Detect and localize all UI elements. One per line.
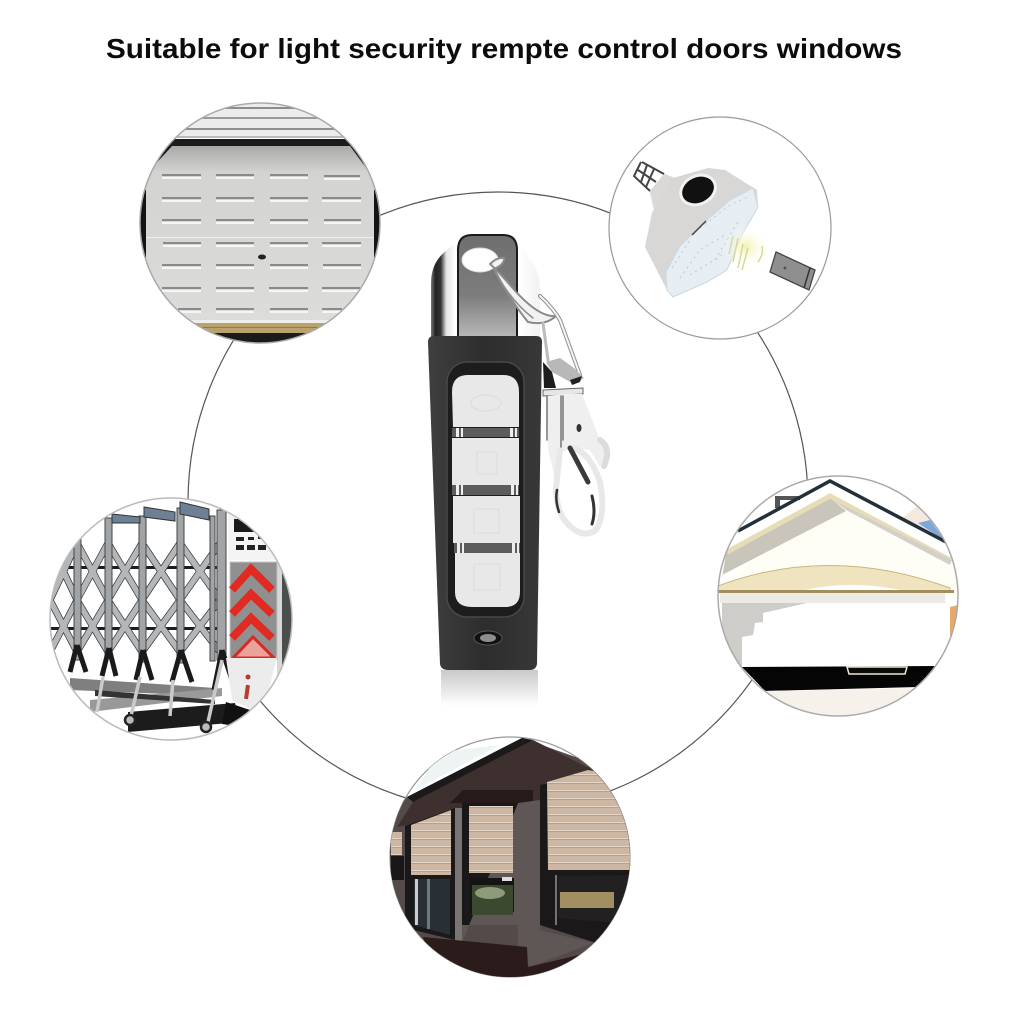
lower dark ledge bbox=[423, 937, 600, 985]
bulb light face bbox=[666, 188, 758, 297]
small remote bbox=[770, 252, 815, 290]
gable sky corner bbox=[900, 506, 939, 534]
bulb slit bbox=[692, 221, 706, 235]
roof eave bbox=[407, 738, 533, 802]
button 4 bbox=[455, 553, 520, 607]
gate horizontal bars bbox=[50, 566, 222, 630]
button separators bbox=[452, 428, 520, 553]
side small shutter bbox=[391, 832, 402, 855]
remote chrome head bbox=[431, 235, 540, 340]
bulb sensor lens bbox=[676, 170, 720, 210]
gate uprights bbox=[74, 508, 226, 663]
clasp body bbox=[547, 394, 608, 490]
panel: gable roof bbox=[718, 476, 958, 720]
garage door top stripes bbox=[176, 104, 344, 138]
left shutter bbox=[411, 810, 451, 875]
middle shutter bbox=[469, 806, 513, 873]
gable cornice arch bbox=[718, 565, 950, 591]
garage circle outline bbox=[140, 103, 380, 343]
swivel barrel bbox=[543, 358, 584, 388]
gate circle outline bbox=[50, 498, 292, 740]
clasp rivet bbox=[576, 424, 582, 432]
clasp tab shadow bbox=[600, 440, 607, 466]
gate wheels bbox=[125, 715, 211, 732]
window frames bbox=[405, 762, 640, 950]
beam bbox=[450, 790, 533, 803]
panel: folding gate bbox=[50, 498, 296, 740]
gate base shadow bbox=[222, 702, 250, 725]
keychain carabiner bbox=[490, 258, 608, 534]
gate warning sign bbox=[230, 562, 277, 658]
gable ground bbox=[766, 688, 914, 716]
bulb neck bbox=[649, 170, 675, 215]
swivel link bbox=[540, 296, 580, 375]
right window glass bbox=[555, 875, 640, 925]
house wall bbox=[380, 738, 640, 990]
garage side shadows bbox=[140, 146, 380, 260]
gate lower panel with mark bbox=[226, 658, 277, 709]
bulb face speckle bbox=[672, 196, 750, 278]
gate legs bbox=[70, 645, 232, 690]
gable beam bbox=[718, 590, 954, 603]
gate rails bbox=[70, 678, 240, 732]
remote dark insert bbox=[458, 235, 517, 337]
clasp edge lines bbox=[547, 396, 563, 447]
garage lock bbox=[258, 254, 266, 260]
gable arch inner bbox=[805, 585, 900, 590]
product: remote control bbox=[428, 235, 608, 706]
gable pediment bbox=[718, 490, 958, 595]
side small window bbox=[391, 856, 404, 880]
right shutter bbox=[547, 770, 640, 870]
gable blue glass bbox=[918, 520, 942, 538]
clasp dark accents bbox=[556, 448, 594, 524]
gate right wall bbox=[277, 564, 292, 676]
gable handle bbox=[847, 667, 907, 674]
garage door slats bbox=[162, 174, 361, 313]
panel: roller shutter windows bbox=[380, 737, 640, 990]
gable masonry stepped wall bbox=[722, 603, 806, 666]
gate scissor lattice bbox=[50, 543, 220, 652]
gate chrome struts bbox=[97, 660, 222, 722]
gable fascia bbox=[727, 496, 950, 560]
middle window glass bbox=[470, 877, 514, 915]
gate handles bbox=[112, 502, 209, 523]
signal waves bbox=[722, 225, 770, 270]
eave soffit bbox=[397, 740, 640, 827]
remote key hole bbox=[462, 248, 498, 272]
garage door panel seam bbox=[146, 237, 374, 238]
gable right trim bbox=[833, 500, 952, 565]
gable small dormer window bbox=[775, 496, 800, 508]
button 3 bbox=[453, 496, 520, 543]
gable orange side bbox=[950, 605, 957, 637]
center wall bbox=[462, 800, 593, 967]
bulb screw base bbox=[633, 162, 664, 191]
clasp hook loop bbox=[556, 448, 602, 534]
sky glow bbox=[415, 745, 500, 790]
left window glass bbox=[414, 879, 450, 935]
connecting ring bbox=[188, 192, 808, 812]
gate control box bbox=[228, 514, 276, 560]
panel: garage door bbox=[140, 103, 380, 343]
clasp top plate bbox=[543, 388, 583, 396]
remote reflection bbox=[441, 670, 538, 706]
title: Suitable for light security rempte control doors windows bbox=[106, 33, 902, 64]
garage door panel bbox=[145, 146, 375, 323]
gable roof ridge bbox=[738, 481, 946, 542]
garage header beam bbox=[169, 139, 351, 146]
remote button frame bbox=[447, 362, 524, 617]
remote LED bbox=[474, 631, 502, 645]
button 1 bbox=[452, 375, 519, 427]
gable left soffit bbox=[722, 497, 846, 578]
remote black body bbox=[428, 336, 542, 670]
bulb body bbox=[645, 168, 758, 297]
panel: remote light bulb bbox=[609, 117, 831, 339]
gray pillars bbox=[455, 808, 462, 943]
gable black band bbox=[742, 666, 938, 691]
gable circle outline bbox=[718, 476, 958, 716]
key ring bbox=[490, 258, 556, 323]
garage floor sill bbox=[191, 320, 329, 342]
button 2 bbox=[452, 438, 519, 485]
